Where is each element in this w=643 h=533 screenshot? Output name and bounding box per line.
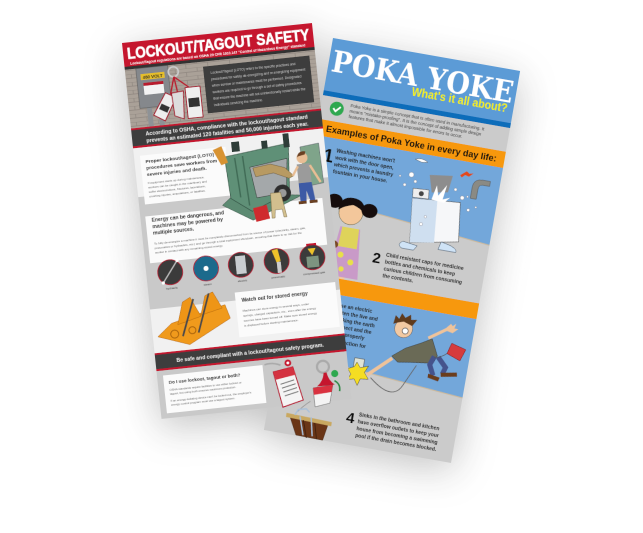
- step 1: [320, 145, 396, 185]
- step 3: Use an electric: [337, 303, 373, 315]
- intro paragraph: Poka Yoke is a simple concept that is often used in manufacturing. It: [350, 103, 485, 132]
- icon: pneumatic: pneumatic: [271, 274, 286, 280]
- card: lockout or tagout: tagout, but using both ensures maximum protection.: [170, 385, 237, 396]
- icon: electric: [227, 251, 255, 284]
- header: red title: Lockout/Tagout regulations are based on OSHA 29 CFR 1910.147 "Control of Hazardous Energy" standard: [130, 43, 305, 66]
- step 3: properly: [344, 333, 365, 342]
- text panel: LOTO definition: individuals servicing the machine.: [214, 98, 263, 107]
- card: energy sources: Energy can be dangerous, and: [151, 210, 224, 224]
- step 2: Child resistant caps for medicine: [386, 253, 464, 272]
- text panel: LOTO definition: Lockout/Tagout (LOTO) refers to the specific practices and: [210, 62, 296, 75]
- band: OSHA statistic: [131, 109, 323, 148]
- band: call to action: [155, 333, 346, 371]
- band: OSHA statistic: According to OSHA, compliance with the lockout/tagout standard: [145, 114, 309, 138]
- card: proper lockout: crushing injuries, amputations, or fatalities.: [149, 189, 206, 198]
- illustration: orange press: [154, 290, 233, 348]
- panel: blue shock area: [275, 286, 476, 398]
- header: Poka Yoke: What's it all about?: [411, 85, 509, 115]
- step 2: bottles and chemicals to keep: [384, 259, 455, 278]
- icon: green check: [329, 101, 345, 117]
- step 1: work with the door open,: [334, 155, 395, 172]
- step 4: [343, 409, 441, 453]
- step 4: pool if the drain becomes blocked.: [355, 433, 437, 453]
- card: proper lockout: workers can be caught in the machinery and: [148, 179, 207, 190]
- icon: hydraulic: hydraulic: [166, 285, 179, 291]
- icon: compressed gas: compressed gas: [303, 270, 326, 276]
- step 3: connect and the: [333, 324, 372, 336]
- card: energy sources: To fully de-energize a machine it must be completely disconnected from its source of power (electricity, steam, gas,: [154, 226, 306, 246]
- icon: hydraulic: [156, 258, 185, 291]
- step 2: [369, 249, 465, 293]
- illustration: girl: [312, 192, 379, 290]
- hero: brick wall: [125, 50, 321, 131]
- step 1: 1: [322, 145, 335, 167]
- text panel: LOTO definition: workers are required to go through a set of safety procedures: [212, 81, 302, 94]
- card: energy sources: pneumatics or hydraulics, etc.) and go through a total equipment shutdown, ensuring that there is no risk for the: [154, 231, 302, 250]
- icon: steam: [192, 255, 220, 288]
- step 2: 2: [371, 249, 382, 268]
- step 2: the contents.: [382, 273, 414, 285]
- card: lockout or tagout: If an energy-isolating device can't be locked out, the employer's: [170, 390, 252, 403]
- sheet: Poka Yoke: [264, 38, 520, 463]
- icon: compressed gas: [299, 242, 327, 276]
- card: stored energy: sources have been turned off. Make sure stored energy: [243, 311, 318, 323]
- card: energy sources: machines may be powered by: [152, 217, 223, 230]
- panel: blue example area: [302, 135, 503, 245]
- card: lockout or tagout: OSHA standards require facilities to use either lockout or: [169, 380, 242, 392]
- step 3: often the live and: [337, 310, 378, 323]
- icon: pneumatic: [263, 247, 291, 280]
- text panel: LOTO definition: [203, 55, 314, 113]
- card: proper lockout: [140, 147, 231, 204]
- card: energy sources: multiple sources.: [153, 226, 195, 237]
- step 2: curious children from consuming: [383, 266, 462, 286]
- step 3: taking the earth: [337, 317, 375, 330]
- band: call to action: Be safe and compliant with a lockout/tagout safety program.: [176, 343, 325, 364]
- header: red title: LOCKOUT/TAGOUT SAFETY: [126, 27, 310, 63]
- card: proper lockout: If equipment starts up during maintenance,: [148, 175, 205, 185]
- illustration: green machine with worker: [212, 130, 327, 226]
- drop shadow: [122, 33, 520, 471]
- card: lockout or tagout: Do I use lockout, tagout or both?: [168, 372, 241, 385]
- card: proper lockout: procedures save workers from: [146, 158, 218, 172]
- text panel: LOTO definition: procedures for safely de-energizing and re-energizing equipment: [211, 67, 306, 81]
- card: proper lockout: severe injuries and death.: [147, 166, 208, 178]
- card: proper lockout: suffer electrocutions, fractures, lacerations,: [149, 184, 206, 194]
- card: lockout or tagout: [163, 365, 266, 413]
- card: stored energy: is displaced before starting maintenance.: [244, 318, 299, 328]
- step 3: protection for: [333, 339, 366, 350]
- step 1: fountain in your house.: [332, 169, 388, 185]
- card: stored energy: Machines can store energy in several ways, under: [242, 302, 309, 313]
- card: stored energy: [235, 282, 340, 337]
- header: Poka Yoke: POKA YOKE: [329, 44, 516, 111]
- orange divider: [289, 270, 479, 319]
- band: OSHA statistic: prevents an estimated 120 fatalities and 50,000 injuries each year.: [146, 121, 309, 144]
- step 4: 4: [345, 409, 357, 428]
- heading bar: examples: Examples of Poka Yoke in every day life:: [325, 124, 497, 165]
- card: lockout or tagout: energy control program must use a tagout system.: [171, 396, 236, 407]
- sheet: Lockout/Tagout Safety: [122, 23, 355, 457]
- card: stored energy: Watch out for stored energy: [241, 291, 308, 304]
- step 1: which prevents a laundry: [332, 162, 394, 179]
- illustration: washing machine: [387, 156, 492, 261]
- intro paragraph: means "mistake-proofing". It is the concept of adding simple design: [349, 109, 482, 137]
- step 4: Sinks in the bathroom and kitchen: [358, 412, 440, 432]
- icon: electrical box with locks and tags: [136, 62, 204, 129]
- icon: steam: steam: [203, 282, 212, 287]
- step 4: house from becoming a swimming: [356, 426, 438, 446]
- grey background sections: [138, 177, 340, 310]
- icon: electric: electric: [238, 278, 248, 283]
- icon: electrical box with locks and tags: 480 VOLT: [142, 73, 163, 80]
- intro paragraph: features that make it almost impossible for errors to occur.: [348, 114, 463, 139]
- text panel: LOTO definition: that ensure the machine will not unintentionally restart while the: [213, 87, 306, 101]
- text panel: LOTO definition: when service or maintenance must be performed. Designated: [212, 74, 302, 88]
- step 1: Washing machines won't: [336, 148, 396, 165]
- card: proper lockout: Proper lockout/tagout (LOTO): [145, 152, 215, 165]
- card: energy sources: [145, 198, 327, 263]
- illustration: electric shock man: [345, 306, 470, 404]
- step 4: have overflow outlets to keep your: [357, 419, 439, 439]
- icons: energy sources: [156, 242, 327, 291]
- illustration: lock tag and breakers: [264, 354, 345, 445]
- card: stored energy: springs, charged capacitors, etc., even after the energy: [243, 306, 317, 318]
- card: energy sources: worker in contact with any remaining stored energy.: [155, 244, 223, 255]
